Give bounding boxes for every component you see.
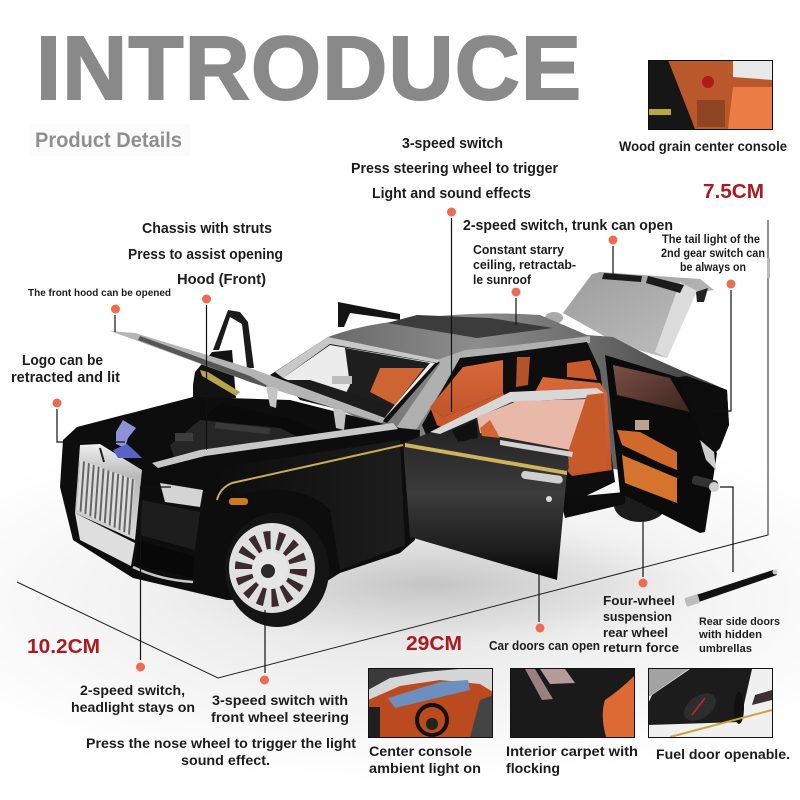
label: 3-speed switch steering wheel: 3-speed switch (402, 135, 503, 152)
label: suspension: return force (603, 640, 679, 655)
umbrella (684, 570, 778, 607)
label: headlight (71, 682, 195, 715)
side marker (229, 498, 248, 505)
thumbnail: fuel door (648, 668, 772, 738)
front wheel (225, 513, 329, 627)
windshield (270, 337, 440, 423)
label: logo: Logo can be (22, 353, 103, 369)
caption: fuel door: Fuel door openable. (656, 746, 790, 762)
label: starry ceiling: ceiling, retractab- (473, 258, 576, 272)
dimension lines (17, 220, 770, 678)
front grille (75, 444, 142, 566)
fender highlight (205, 440, 405, 570)
silver fender strip (152, 423, 398, 468)
dimension: length: 29CM (406, 633, 462, 655)
label: front wheel: 3-speed switch with (212, 692, 348, 708)
dimension: height: 7.5CM (703, 181, 764, 203)
dimension: width: 10.2CM (27, 636, 100, 658)
label: hood: Press to assist opening (128, 246, 283, 263)
label: umbrellas (698, 616, 780, 655)
label: tail light: 2nd gear switch can (661, 248, 765, 260)
label: hood (128, 220, 283, 288)
open front door (403, 388, 607, 580)
label: umbrellas: Rear side doors (699, 616, 780, 628)
subtitle (30, 124, 190, 156)
caption: carpet: flocking (506, 760, 560, 776)
label: logo (11, 353, 120, 386)
label: logo: retracted and lit (11, 370, 120, 386)
callout lines (57, 218, 733, 673)
label: 3-speed switch steering wheel: Press steering wheel to trigger (351, 160, 558, 177)
label: tail light (661, 234, 765, 274)
roof and rear body (270, 313, 729, 470)
label: nose wheel (86, 735, 356, 768)
label: wood grain: Wood grain center console (619, 139, 787, 154)
label: nose wheel: Press the nose wheel to trigger the light (86, 735, 356, 751)
caption: center console (369, 743, 481, 776)
label: hood: Hood (Front) (177, 271, 266, 288)
label: tail light: The tail light of the (662, 234, 760, 246)
trunk lid (545, 272, 714, 358)
engine bay (160, 403, 333, 462)
sunroof (387, 315, 553, 338)
open hood (110, 331, 385, 430)
label: headlight: headlight stays on (71, 699, 195, 715)
label: front hood: The front hood can be opened (28, 287, 171, 299)
caption: carpet: Interior carpet with (506, 743, 638, 759)
title: INTRODUCE (36, 19, 581, 119)
label: trunk switch: 2-speed switch, trunk can open (463, 217, 673, 234)
rear wheel and sill (560, 488, 666, 522)
label: car doors: Car doors can open (489, 639, 600, 653)
caption: center console: ambient light on (369, 760, 481, 776)
label: starry ceiling: Constant starry (473, 243, 564, 257)
thumbnail: wood grain console (648, 60, 772, 130)
label: suspension: Four-wheel (603, 593, 675, 608)
label: tail light: be always on (680, 262, 746, 274)
headlight (160, 483, 203, 507)
label: starry ceiling (473, 243, 576, 287)
label: hood: Chassis with struts (142, 220, 272, 237)
hood mascot (113, 420, 142, 458)
cabin interior with orange seats (422, 342, 615, 506)
label: front wheel (211, 692, 349, 725)
thumbnail: center console (368, 668, 493, 738)
label: suspension: suspension (603, 609, 672, 624)
far side door (193, 302, 400, 402)
floor shadow (0, 415, 800, 785)
gold pinstripe (217, 445, 403, 500)
label: suspension: rear wheel (603, 625, 668, 640)
open rear door (605, 355, 719, 533)
caption: carpet (506, 743, 638, 776)
label: 3-speed switch steering wheel: Light and sound effects (372, 185, 531, 202)
car illustration (60, 272, 729, 627)
thumbnail: carpet (510, 668, 634, 738)
label: 3-speed switch steering wheel (351, 135, 558, 202)
caption: center console: Center console (369, 743, 472, 759)
callout dots (52, 208, 736, 684)
label: suspension (603, 593, 679, 655)
subtitle: Product Details (35, 129, 182, 152)
label: front wheel: front wheel steering (211, 709, 349, 725)
label: headlight: 2-speed switch, (80, 682, 185, 698)
label: starry ceiling: le sunroof (473, 273, 532, 287)
label: nose wheel: sound effect. (181, 752, 270, 768)
label: umbrellas: umbrellas (699, 643, 752, 655)
label: umbrellas: with hidden (698, 629, 762, 641)
front body (60, 397, 420, 600)
front bumper (133, 500, 200, 582)
